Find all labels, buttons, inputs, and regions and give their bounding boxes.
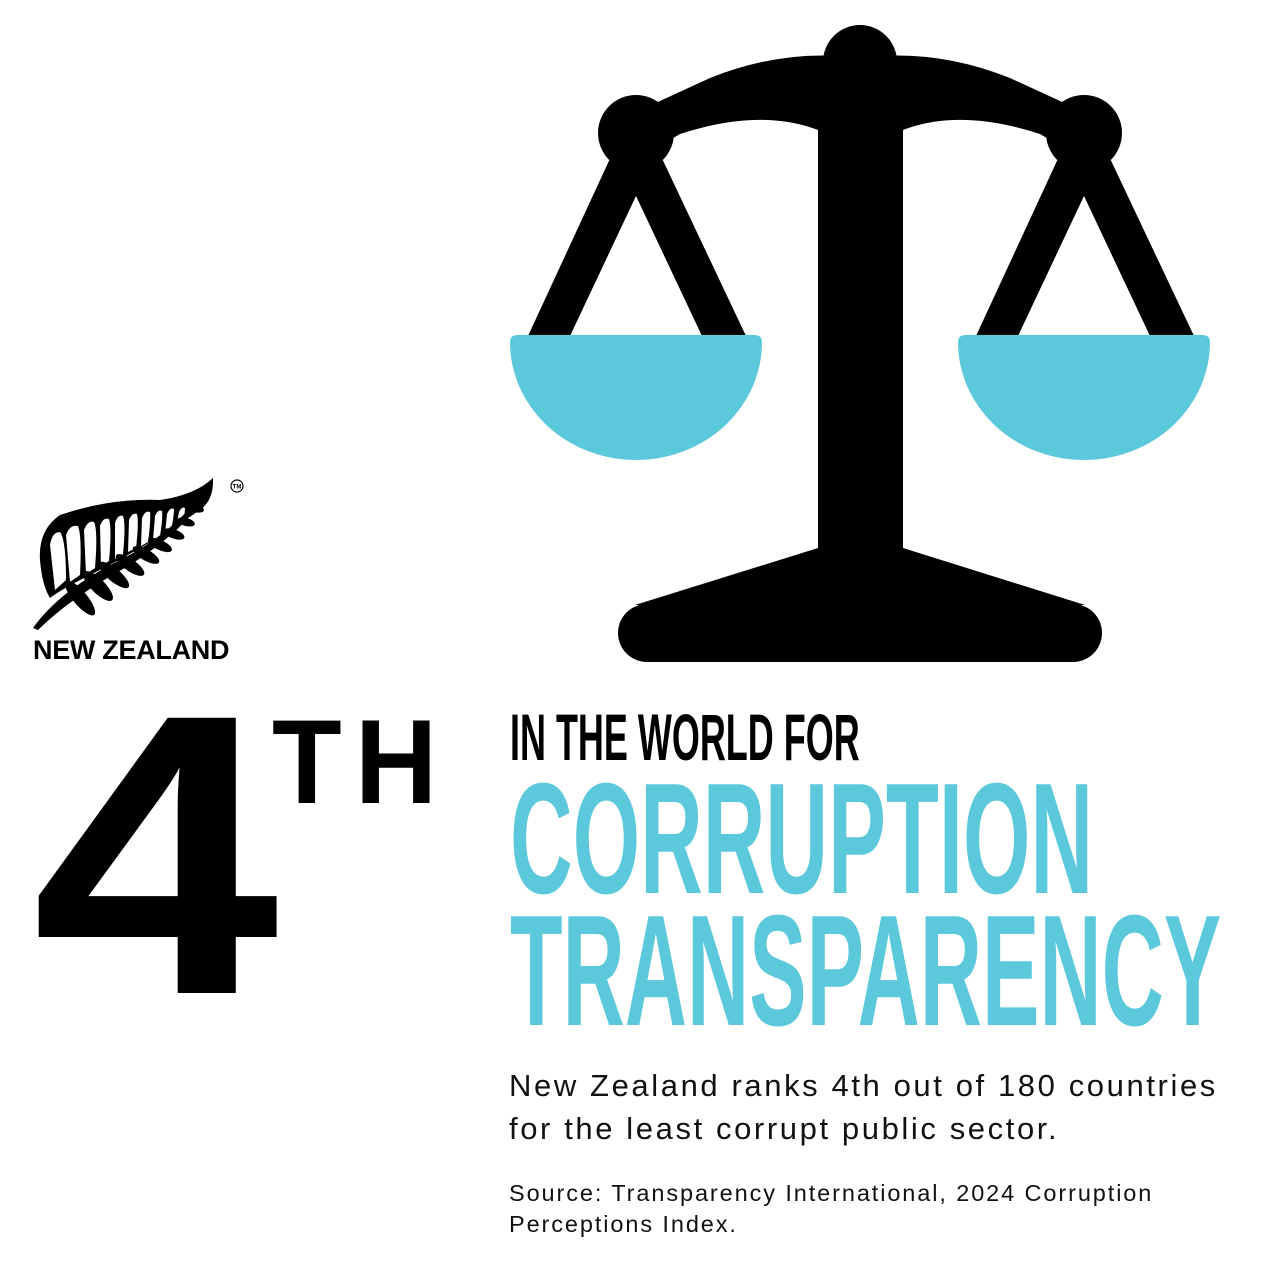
superscript TH: TH (272, 695, 451, 829)
logo: New Zealand fern (33, 478, 244, 665)
TM mark (231, 480, 243, 492)
top knob (823, 25, 897, 99)
big ranking number (32, 631, 451, 1078)
source note (509, 1180, 1153, 1237)
left arms (528, 150, 746, 336)
body text: New Zealand ranks 4th out of 180 countries (509, 1068, 1218, 1103)
logo text: NEW ZEALAND (33, 635, 229, 665)
body text (509, 1068, 1218, 1146)
logo: New Zealand fern: TM (233, 484, 241, 490)
lower leaflets (60, 504, 205, 619)
heading block (510, 700, 1221, 1059)
beam (636, 56, 1084, 160)
body text: for the least corrupt public sector. (509, 1111, 1059, 1146)
source note: Perceptions Index. (509, 1211, 738, 1237)
icon: scales of justice (510, 25, 1210, 662)
stem (33, 478, 213, 630)
base (635, 548, 1085, 605)
heading: transparency: TRANSPARENCY (510, 883, 1221, 1059)
heading: in the world for: IN THE WORLD FOR (510, 700, 860, 774)
source note: Source: Transparency International, 2024 Corruption (509, 1180, 1153, 1206)
column (818, 90, 903, 560)
heading: corruption: CORRUPTION (510, 751, 1093, 927)
right arms (976, 150, 1194, 336)
upper fronds block (40, 478, 213, 598)
number 4: 4 (32, 631, 279, 1078)
